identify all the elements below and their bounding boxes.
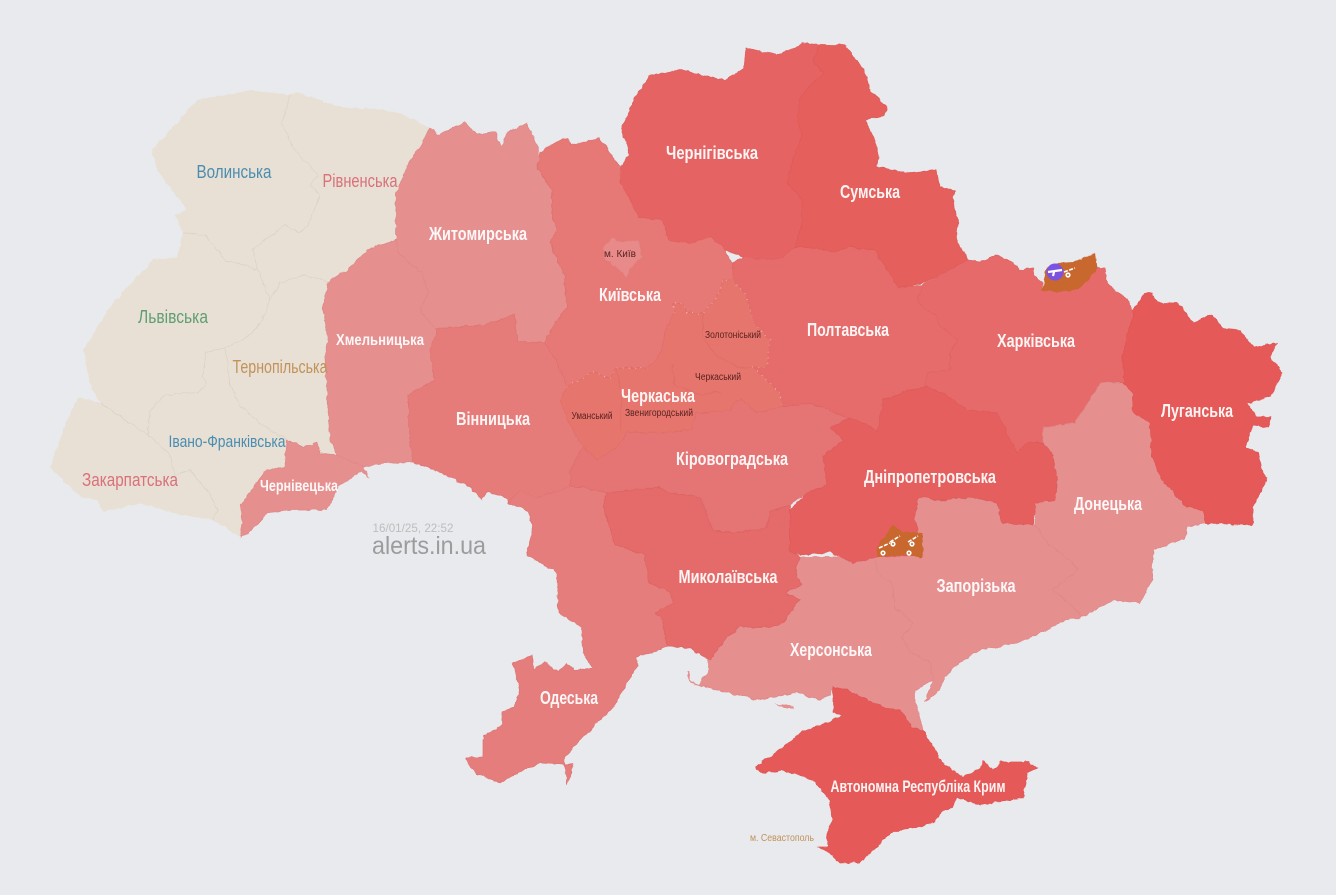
icon: artillery Kharkiv <box>1064 268 1075 277</box>
icon: artillery Nikopol <box>879 536 918 555</box>
label: Луганська: Луганська <box>1161 401 1234 421</box>
label: Закарпатська: Закарпатська <box>82 470 179 490</box>
region: Київська <box>537 138 733 387</box>
region: Запорізька <box>875 497 1083 702</box>
label: Чернівецька: Чернівецька <box>260 478 338 495</box>
label: Хмельницька: Хмельницька <box>336 332 424 349</box>
label: Дніпропетровська: Дніпропетровська <box>864 467 997 487</box>
label: Запорізька: Запорізька <box>936 576 1016 596</box>
label: Івано-Франківська: Івано-Франківська <box>168 432 286 451</box>
label: Уманський: Уманський <box>572 411 612 422</box>
region: Чернігівська <box>620 43 823 260</box>
region: Хмельницька <box>323 240 437 467</box>
label: Харківська: Харківська <box>997 331 1076 351</box>
timestamp: 16/01/25, 22:52 <box>372 521 454 535</box>
region: Сумська <box>787 45 968 288</box>
region: Одеська <box>465 487 673 785</box>
label: Житомирська: Житомирська <box>428 224 528 244</box>
icon: purple drone circle <box>1046 264 1064 280</box>
region: Автономна Республіка Крим <box>755 687 1038 863</box>
region: Дніпропетровська <box>790 387 1057 563</box>
region: Чернівецька <box>240 440 369 537</box>
label: Київська: Київська <box>599 285 662 305</box>
label: м. Севастополь: м. Севастополь <box>750 833 814 844</box>
label: Золотоніський: Золотоніський <box>705 330 761 341</box>
label: м. Київ: м. Київ <box>604 249 636 260</box>
label: Волинська: Волинська <box>196 162 272 182</box>
label: Звенигородський: Звенигородський <box>625 408 693 419</box>
label: Чернігівська: Чернігівська <box>666 143 759 163</box>
label: Рівненська: Рівненська <box>322 171 398 191</box>
label: Вінницька: Вінницька <box>456 409 531 429</box>
hotspot: Kharkiv border shelling <box>1042 253 1097 292</box>
label: Автономна Республіка Крим: Автономна Республіка Крим <box>830 777 1006 796</box>
region: Житомирська <box>396 122 567 343</box>
labels <box>82 143 1234 844</box>
label: Донецька: Донецька <box>1074 494 1143 514</box>
label: Тернопільська: Тернопільська <box>232 357 328 377</box>
label: Кіровоградська: Кіровоградська <box>676 449 789 469</box>
region: Донецька <box>1035 383 1205 617</box>
region: western oblasts (no alert) <box>50 90 430 537</box>
region: Черкаська with districts <box>560 280 782 460</box>
region: Полтавська <box>732 247 958 430</box>
label: Черкаська: Черкаська <box>621 386 696 406</box>
region: Кіровоградська <box>570 398 850 533</box>
region: Луганська <box>1122 293 1282 525</box>
watermark: alerts.in.ua: alerts.in.ua <box>372 532 486 560</box>
label: Сумська: Сумська <box>840 182 901 202</box>
label: Одеська: Одеська <box>540 688 599 708</box>
region: Вінницька <box>408 315 583 503</box>
hotspot: Nikopol shelling <box>877 525 923 557</box>
region: Харківська <box>917 255 1133 453</box>
label: Миколаївська: Миколаївська <box>678 567 778 587</box>
label: Львівська: Львівська <box>138 307 209 327</box>
label: Черкаський: Черкаський <box>695 372 741 383</box>
label: Полтавська: Полтавська <box>807 320 890 340</box>
label: Херсонська: Херсонська <box>790 640 873 660</box>
region: Херсонська <box>688 557 933 730</box>
region: Миколаївська <box>603 487 802 660</box>
region: м. Київ <box>603 238 642 278</box>
